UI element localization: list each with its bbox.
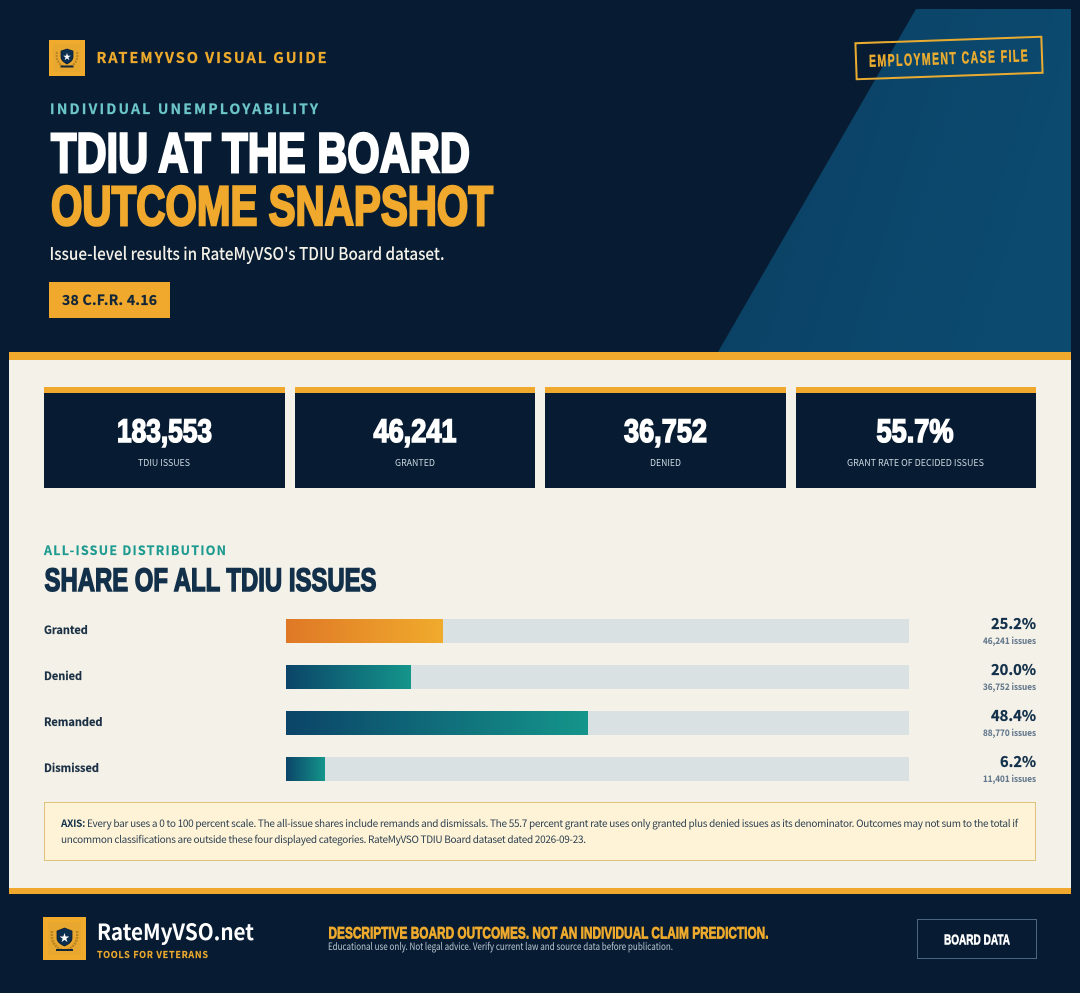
panel: content <box>9 352 1071 894</box>
section heading: SHARE OF ALL TDIU ISSUES <box>44 562 376 598</box>
header diagonal blue panel <box>718 9 1071 352</box>
section kicker: ALL-ISSUE DISTRIBUTION <box>43 540 226 559</box>
bar row: granted: 46,241 issues <box>983 634 1036 647</box>
bar row: dismissed: 11,401 issues <box>983 772 1036 785</box>
panel: footer <box>43 915 1036 961</box>
stat card: TDIU issues: TDIU ISSUES <box>138 455 190 469</box>
callout: axis note: AXIS: Every bar uses a 0 to 100 percent scale. The all-issue shares include remands and dismissals. The 55.7 percent grant rate uses only granted plus denied issues as its denominator. Outcomes may not sum to the total if <box>60 815 1019 830</box>
bar row: denied: 20.0% <box>991 659 1036 680</box>
title <box>51 121 493 237</box>
stat card: grant rate <box>796 387 1036 488</box>
bar row: dismissed <box>44 751 1036 785</box>
stat card: denied <box>545 387 786 488</box>
kicker: INDIVIDUAL UNEMPLOYABILITY <box>50 99 319 119</box>
bar row: denied: Denied <box>44 668 82 684</box>
bar row: dismissed: 6.2% <box>1000 751 1036 772</box>
stat card: denied: 36,752 <box>624 413 707 449</box>
icon: footer shield logo <box>43 917 86 960</box>
stat card: granted: 46,241 <box>374 413 456 449</box>
brand eyebrow: RATEMYVSO VISUAL GUIDE <box>96 47 327 68</box>
title: TDIU AT THE BOARD <box>51 121 470 184</box>
subtitle: Issue-level results in RateMyVSO's TDIU Board dataset. <box>50 241 444 266</box>
footer disclaimer text: Educational use only. Not legal advice. Verify current law and source data before publication. <box>328 938 673 953</box>
gold bottom band <box>9 888 1071 894</box>
footer brand name: RateMyVSO.net <box>97 915 254 947</box>
stat card: TDIU issues: 183,553 <box>117 413 212 449</box>
bar row: dismissed: Dismissed <box>44 760 99 776</box>
bar row: remanded: 88,770 issues <box>983 726 1036 739</box>
badge: regulation: 38 C.F.R. 4.16 <box>62 290 157 310</box>
bar row: remanded: 48.4% <box>991 705 1036 726</box>
stat card: grant rate: 55.7% <box>876 413 954 449</box>
footer disclaimer heading: DESCRIPTIVE BOARD OUTCOMES. NOT AN INDIVIDUAL CLAIM PREDICTION. <box>328 925 768 943</box>
cream content background <box>9 352 1071 894</box>
badge: regulation <box>49 282 170 318</box>
callout: axis note <box>44 802 1036 860</box>
bar row: granted: Granted <box>44 622 88 638</box>
icon: top shield logo: ★ <box>63 52 71 62</box>
title: OUTCOME SNAPSHOT <box>51 174 493 237</box>
bar row: denied: 36,752 issues <box>983 680 1036 693</box>
bar row: remanded <box>44 705 1036 739</box>
bar row: remanded: Remanded <box>44 714 102 730</box>
stat card: TDIU issues <box>44 387 285 488</box>
stamp: employment case file <box>855 37 1043 79</box>
bar row: granted <box>44 613 1036 647</box>
bar row: denied <box>44 659 1036 693</box>
stat card: denied: DENIED <box>650 455 681 469</box>
panel: header <box>49 9 1071 352</box>
footer tagline: TOOLS FOR VETERANS <box>97 948 208 961</box>
icon: footer shield logo: ★ <box>60 934 70 944</box>
callout: axis note: uncommon classifications are outside these four displayed categories. RateMyVSO TDIU Board dataset dated 2026-09-23. <box>61 831 586 846</box>
bar chart: share of all issues <box>44 613 1036 785</box>
stat card: granted: GRANTED <box>395 455 435 469</box>
gold top band <box>9 352 1071 360</box>
stat card: grant rate: GRANT RATE OF DECIDED ISSUES <box>847 455 984 469</box>
bar row: granted: 25.2% <box>991 613 1036 634</box>
stamp: employment case file: EMPLOYMENT CASE FILE <box>869 46 1028 70</box>
icon: top shield logo <box>49 40 85 76</box>
button: board data <box>918 920 1036 958</box>
stat card: granted <box>295 387 535 488</box>
button: board data: BOARD DATA <box>944 932 1010 949</box>
